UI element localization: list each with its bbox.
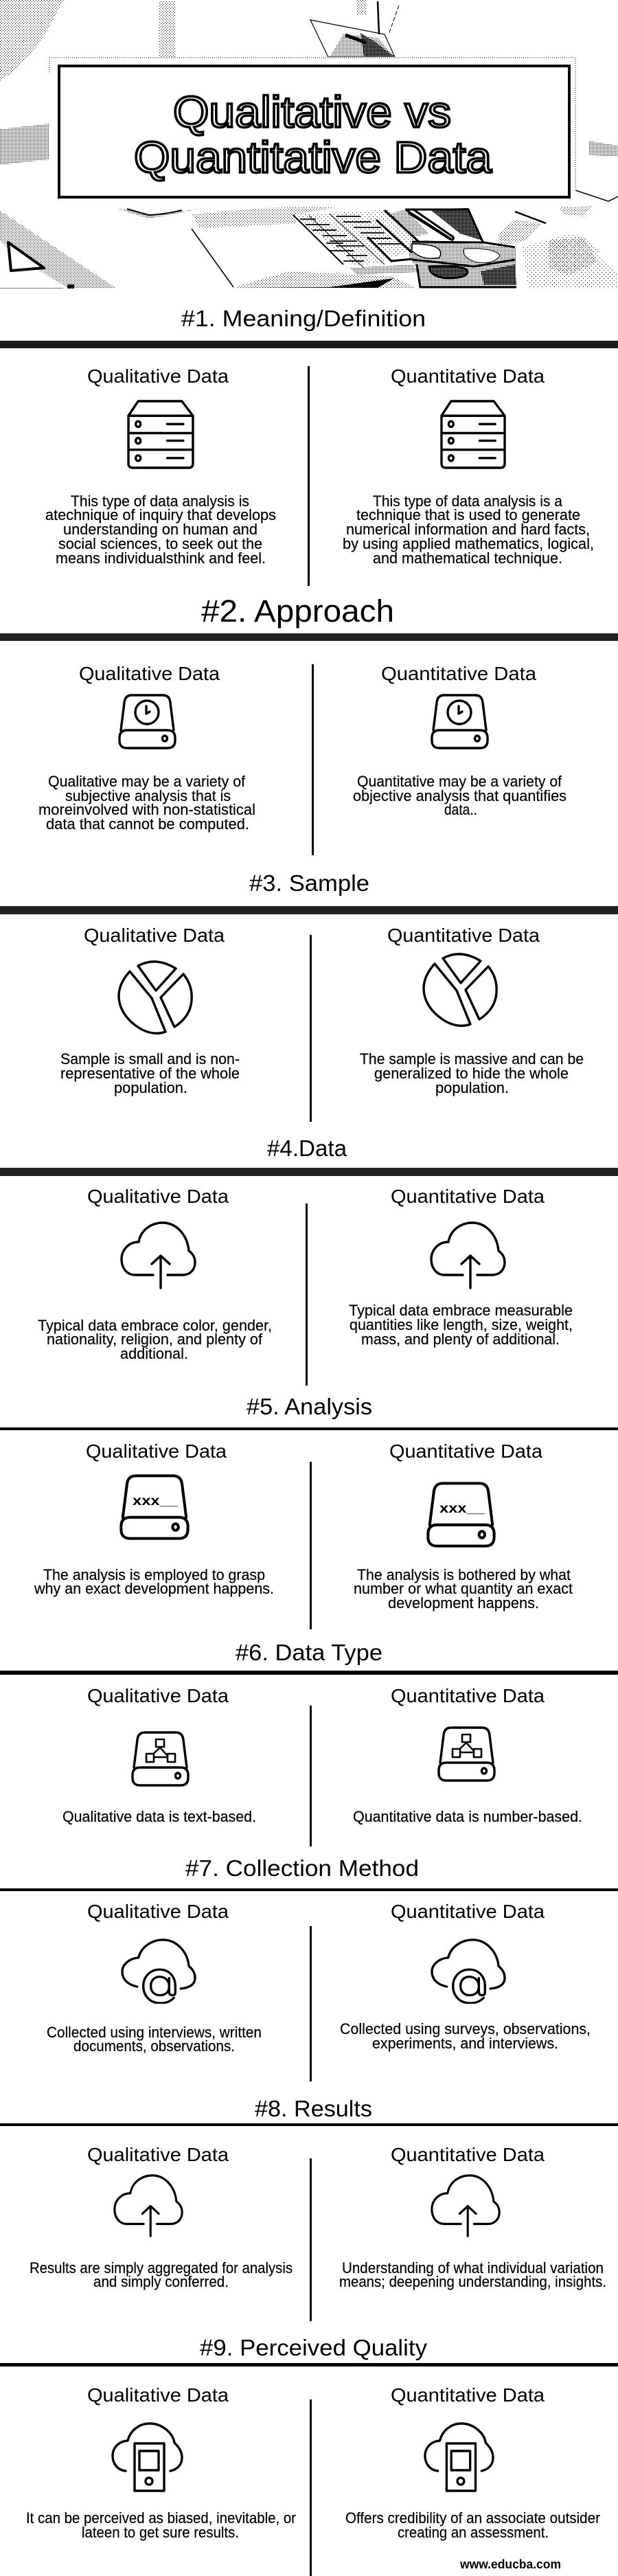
photo: upper dither band	[192, 206, 343, 228]
header rule	[0, 2363, 618, 2366]
text: qualitative approach	[38, 773, 255, 833]
header rule	[0, 1427, 618, 1430]
panel: section 7 collection method	[0, 1856, 618, 2081]
text: qualitative meaning: social sciences, to seek out the	[58, 535, 262, 552]
text: qualitative data: Typical data embrace color, gender,	[38, 1317, 272, 1334]
icon: pie chart	[119, 962, 192, 1033]
heading: #4.Data	[267, 1136, 347, 1162]
column heading: quantitative: Quantitative Data	[381, 663, 536, 684]
icon: terminal disk: xxx__	[133, 1494, 179, 1509]
column heading: qualitative: Qualitative Data	[86, 1440, 227, 1462]
heading: #7. Collection Method	[185, 1856, 419, 1882]
column divider	[312, 664, 314, 855]
panel: section 5 analysis	[0, 1394, 618, 1629]
icon: pie chart	[424, 954, 496, 1026]
photo: dithered left block	[0, 124, 49, 165]
footer: website: www.educba.com	[459, 2557, 561, 2571]
title: Qualitative vs	[173, 87, 451, 137]
column heading: quantitative: Quantitative Data	[391, 1186, 545, 1207]
column divider	[310, 2158, 312, 2321]
text: qualitative perceived quality: It can be perceived as biased, inevitable, or	[26, 2509, 296, 2527]
text: quantitative meaning	[343, 493, 594, 567]
text: quantitative approach	[353, 773, 566, 818]
icon: cloud phone	[113, 2424, 182, 2491]
photo: dithered wall shade top left	[0, 0, 64, 81]
text: qualitative approach: moreinvolved with non-statistical	[38, 801, 255, 818]
text: quantitative sample: The sample is massive and can be	[360, 1050, 584, 1067]
header rule	[0, 1168, 618, 1176]
icon: terminal disk: xxx__	[439, 1502, 485, 1516]
photo: dithered right block	[588, 141, 618, 157]
photo: bottom left wedge	[0, 210, 117, 289]
text: qualitative results: Results are simply aggregated for analysis	[30, 2259, 293, 2276]
title: Quantitative Data	[134, 133, 492, 182]
header rule	[0, 2123, 618, 2126]
text: qualitative analysis: why an exact development happens.	[34, 1580, 274, 1597]
text: quantitative collection: experiments, and interviews.	[372, 2035, 558, 2052]
photo: swoosh	[118, 206, 199, 218]
banner: laptop photo background	[0, 0, 618, 289]
panel: section 6 data type	[0, 1640, 618, 1846]
panel: section 9 perceived quality	[0, 2336, 618, 2576]
text: qualitative approach: subjective analysis that is	[65, 787, 231, 804]
text: qualitative analysis	[34, 1566, 274, 1597]
photo: right desk shading	[498, 206, 618, 289]
column heading: quantitative: Quantitative Data	[391, 2384, 545, 2406]
column heading: qualitative: Qualitative Data	[79, 663, 220, 684]
icon: network disk	[439, 1728, 494, 1781]
column heading: qualitative: Qualitative Data	[87, 1685, 229, 1706]
text: quantitative sample	[360, 1050, 584, 1096]
photo: laptop screen hinge	[388, 208, 484, 242]
panel: section 4 data	[0, 1136, 618, 1386]
text: quantitative analysis: development happens.	[388, 1594, 539, 1612]
column heading: qualitative: Qualitative Data	[87, 1901, 229, 1922]
column divider	[306, 1204, 308, 1386]
text: quantitative analysis	[354, 1566, 573, 1612]
text: quantitative data: mass, and plenty of additional.	[361, 1331, 560, 1348]
text: qualitative perceived quality: lateen to get sure results.	[82, 2524, 239, 2541]
icon: server	[128, 401, 193, 468]
text: qualitative sample: representative of the whole	[60, 1065, 240, 1082]
text: quantitative collection	[340, 2020, 591, 2052]
heading: #1. Meaning/Definition	[181, 306, 426, 332]
column heading: qualitative: Qualitative Data	[87, 365, 229, 387]
text: quantitative data	[349, 1302, 573, 1348]
text: qualitative data type: Qualitative data is text-based.	[62, 1808, 256, 1825]
header rule	[0, 1888, 618, 1891]
photo: laptop lid edge	[192, 229, 233, 287]
text: quantitative approach: Quantitative may be a variety of	[357, 773, 562, 790]
text: qualitative data	[38, 1317, 272, 1362]
column divider	[310, 1706, 312, 1846]
heading: #6. Data Type	[236, 1640, 382, 1666]
header rule	[0, 633, 618, 641]
photo: dithered wall strip	[159, 1, 175, 58]
icon: clock disk	[432, 695, 488, 748]
text: quantitative meaning: numerical information and hard facts,	[346, 521, 590, 538]
text: quantitative meaning: by using applied mathematics, logical,	[343, 535, 594, 552]
photo: keyboard	[293, 210, 419, 268]
icon: cloud email	[432, 1940, 505, 2003]
text: qualitative meaning: This type of data analysis is	[71, 493, 249, 510]
text: quantitative approach: data..	[444, 801, 477, 818]
text: quantitative analysis: number or what quantity an exact	[354, 1580, 573, 1597]
column heading: quantitative: Quantitative Data	[387, 925, 540, 946]
text: qualitative collection: Collected using interviews, written	[47, 2024, 262, 2041]
heading: #9. Perceived Quality	[200, 2336, 427, 2361]
icon: cloud upload	[431, 1223, 505, 1288]
header rule	[0, 1671, 618, 1675]
column divider	[310, 2399, 312, 2576]
column heading: qualitative: Qualitative Data	[87, 1186, 229, 1207]
text: qualitative data: nationality, religion, and plenty of	[47, 1331, 263, 1348]
column heading: qualitative: Qualitative Data	[87, 2384, 229, 2406]
panel: section 2 approach	[0, 594, 618, 855]
text: quantitative perceived quality	[345, 2509, 600, 2541]
text: qualitative collection	[47, 2024, 262, 2055]
icon: terminal disk	[428, 1483, 494, 1546]
text: qualitative perceived quality	[26, 2509, 296, 2541]
column heading: quantitative: Quantitative Data	[391, 365, 545, 387]
column heading: quantitative: Quantitative Data	[391, 1901, 545, 1922]
icon: network disk	[133, 1732, 188, 1785]
text: qualitative meaning: means individualsthink and feel.	[56, 550, 266, 567]
text: qualitative meaning	[45, 493, 276, 567]
column heading: quantitative: Quantitative Data	[389, 1440, 542, 1462]
icon: terminal disk	[121, 1476, 188, 1539]
text: quantitative meaning: technique that is used to generate	[356, 506, 580, 523]
photo: hand	[409, 240, 516, 287]
text: qualitative sample: population.	[114, 1079, 187, 1096]
photo: small triangle object	[8, 242, 44, 271]
icon: clock disk	[119, 695, 175, 748]
text: qualitative meaning: understanding on human and	[63, 521, 258, 538]
icon: cloud upload	[122, 1223, 195, 1288]
header rule	[0, 341, 618, 348]
icon: cloud upload	[115, 2176, 182, 2236]
text: quantitative data: Typical data embrace measurable	[349, 1302, 573, 1319]
text: qualitative analysis: The analysis is employed to grasp	[43, 1566, 265, 1583]
text: quantitative meaning: This type of data analysis is a	[373, 493, 563, 510]
photo: laptop base	[233, 264, 419, 289]
column heading: quantitative: Quantitative Data	[391, 1685, 545, 1706]
column divider	[310, 1462, 312, 1629]
column divider	[308, 366, 310, 586]
text: qualitative collection: documents, observations.	[73, 2037, 235, 2055]
text: quantitative results	[339, 2259, 606, 2290]
text: qualitative approach: data that cannot be computed.	[46, 815, 249, 833]
column divider	[310, 935, 312, 1122]
photo: right edge line	[575, 190, 618, 201]
text: qualitative sample	[60, 1050, 240, 1096]
text: quantitative collection: Collected using surveys, observations,	[340, 2020, 591, 2037]
text: quantitative data type: Quantitative data is number-based.	[353, 1808, 582, 1825]
text: quantitative sample: population.	[435, 1079, 509, 1096]
text: quantitative approach: objective analysis that quantifies	[353, 787, 566, 804]
text: quantitative analysis: The analysis is bothered by what	[357, 1566, 571, 1583]
header rule	[0, 906, 618, 914]
column heading: qualitative: Qualitative Data	[84, 925, 225, 946]
icon: cloud phone	[425, 2424, 493, 2491]
panel: section 8 results	[0, 2097, 618, 2321]
heading: #2. Approach	[201, 594, 394, 629]
column heading: qualitative: Qualitative Data	[87, 2144, 229, 2165]
text: quantitative data: quantities like length, size, weight,	[350, 1316, 573, 1333]
title	[134, 87, 492, 182]
heading: #8. Results	[255, 2097, 372, 2122]
text: quantitative perceived quality: Offers credibility of an associate outsider	[345, 2509, 600, 2527]
column divider	[310, 1926, 312, 2081]
text: quantitative sample: generalized to hide the whole	[374, 1065, 569, 1082]
text: qualitative approach: Qualitative may be a variety of	[48, 773, 246, 790]
text: quantitative meaning: and mathematical technique.	[373, 550, 562, 567]
column heading: quantitative: Quantitative Data	[391, 2144, 545, 2165]
heading: #5. Analysis	[247, 1394, 372, 1420]
text: qualitative results: and simply conferred.	[93, 2273, 229, 2290]
icon: cloud upload	[432, 2176, 499, 2236]
icon: server	[442, 401, 505, 468]
text: quantitative perceived quality: creating an assessment.	[398, 2524, 549, 2541]
title panel	[49, 57, 575, 207]
panel: section 3 sample	[0, 871, 618, 1122]
panel: section 1 meaning	[0, 306, 618, 586]
text: qualitative sample: Sample is small and is non-	[60, 1050, 240, 1067]
text: qualitative results	[30, 2259, 293, 2290]
photo: pen holder	[310, 0, 399, 57]
icon: cloud email	[122, 1940, 195, 2003]
text: qualitative meaning: atechnique of inquiry that develops	[45, 506, 276, 523]
text: quantitative results: Understanding of what individual variation	[342, 2259, 604, 2276]
heading: #3. Sample	[249, 871, 369, 896]
text: qualitative data: additional.	[120, 1345, 188, 1362]
